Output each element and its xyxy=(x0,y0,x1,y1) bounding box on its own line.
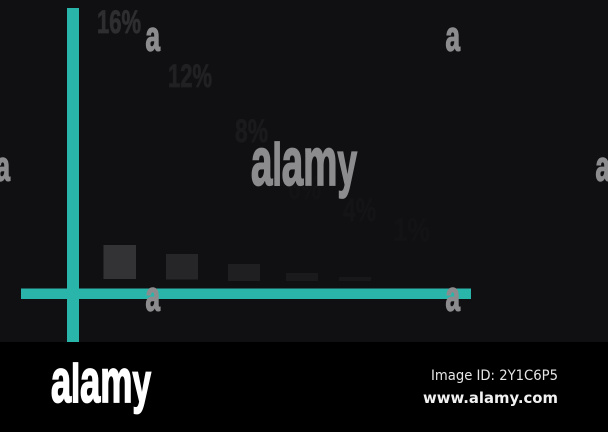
percentage labels xyxy=(97,4,430,248)
watermark xyxy=(0,12,608,320)
footer band xyxy=(0,342,608,432)
bar chart xyxy=(104,245,371,281)
label: 12%: 12% xyxy=(168,58,212,94)
chart axes xyxy=(21,8,471,342)
horizontal axis xyxy=(21,288,471,299)
label: 4%: 4% xyxy=(343,192,376,228)
watermark: top left mark: a xyxy=(146,12,160,60)
watermark: centre logo: alamy xyxy=(251,124,357,200)
bar 5 xyxy=(339,277,371,281)
bar 1 xyxy=(104,245,136,279)
watermark: top right mark: a xyxy=(446,12,460,60)
bar 3 xyxy=(228,264,260,281)
vertical axis xyxy=(67,8,79,342)
label: 6%: 6% xyxy=(288,170,321,206)
label: 16%: 16% xyxy=(97,4,141,40)
website url: www.alamy.com xyxy=(423,389,558,407)
bar 4 xyxy=(286,273,318,281)
watermark: bottom right mark: a xyxy=(446,272,460,320)
watermark: bottom left mark: a xyxy=(146,272,160,320)
label: 8%: 8% xyxy=(235,113,268,149)
bar 2 xyxy=(166,254,198,280)
footer logo: alamy xyxy=(51,347,151,415)
label: 1%: 1% xyxy=(393,212,430,248)
image id: Image ID: 2Y1C6P5 xyxy=(431,368,558,384)
